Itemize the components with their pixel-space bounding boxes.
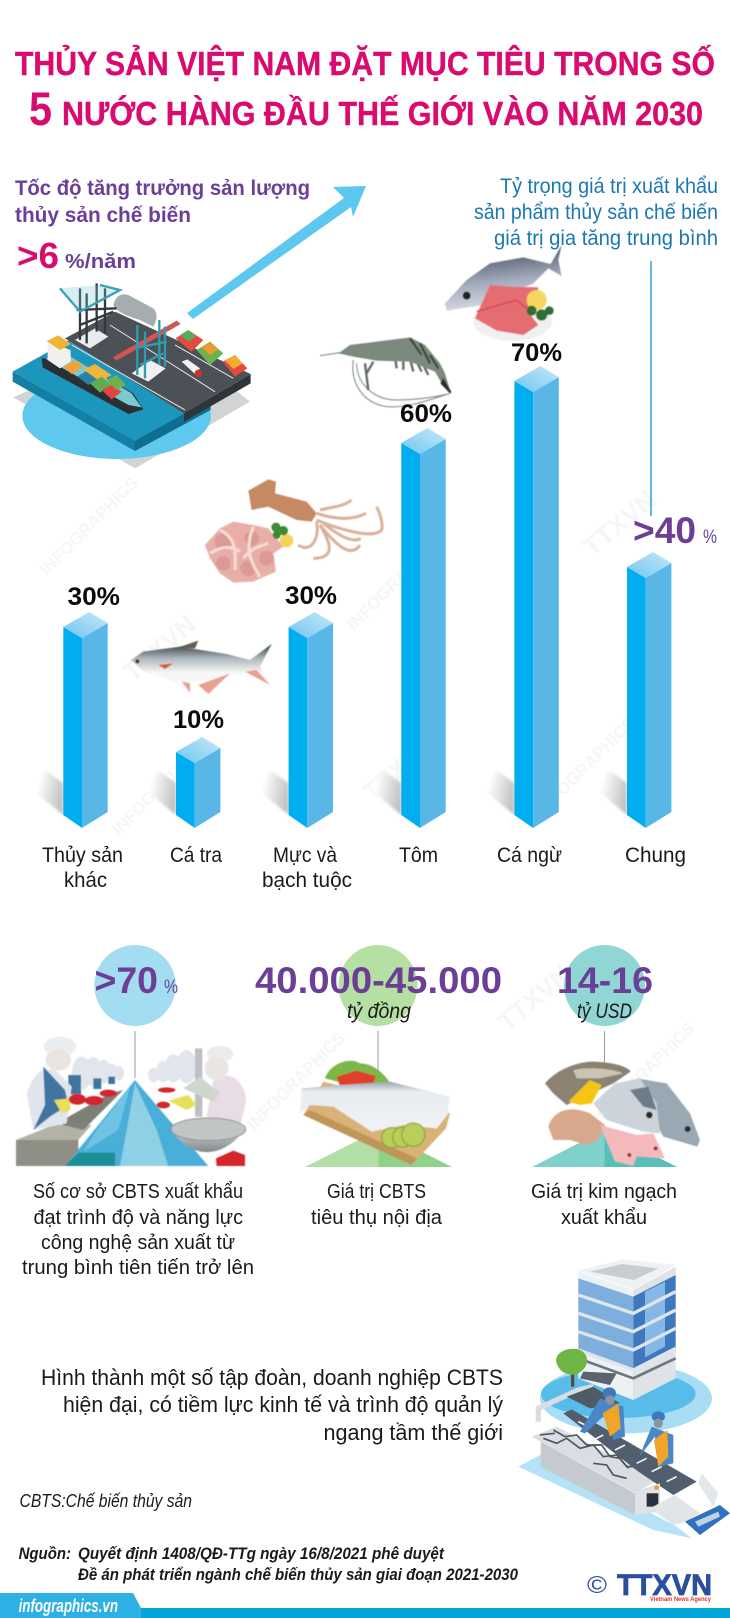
text: enterprises goal: Hình thành một số tập đoàn, doanh nghiệp CBTS: [41, 1365, 503, 1390]
text: enterprises goal: ngang tầm thế giới: [324, 1420, 503, 1445]
caption: exporters: công nghệ sản xuất từ: [41, 1231, 235, 1254]
note: abbreviation: CBTS:Chế biến thủy sản: [20, 1491, 192, 1511]
caption: export: [531, 1180, 677, 1229]
machine: [541, 1442, 635, 1515]
bar chart: [33, 366, 671, 828]
image: pangasius fillet on board: [300, 1061, 450, 1165]
watermarks: INFOGRAPHICS: [533, 713, 639, 819]
axis labels: [42, 844, 686, 892]
icon: squid and octopus: [205, 479, 382, 583]
arrow: growth: [187, 186, 366, 319]
growth heading: Tốc độ tăng trưởng sản lượng: [15, 176, 310, 200]
worker 1: [580, 1398, 625, 1440]
stat: >70%: %: [164, 977, 178, 998]
text: enterprises goal: hiện đại, có tiềm lực kinh tế và trình độ quản lý: [63, 1392, 504, 1417]
logo: TTXVN: ©: [587, 1572, 607, 1599]
worker right: [207, 1076, 246, 1127]
caption: export: Giá trị kim ngạch: [531, 1180, 677, 1203]
bar: Cá tra: [146, 737, 220, 828]
ship: [42, 356, 143, 414]
row left: [72, 1057, 124, 1090]
footer bar: [0, 1593, 730, 1618]
growth heading: >6: [17, 235, 59, 276]
triangle: teal base: [532, 1130, 677, 1167]
tree: [571, 1373, 574, 1387]
right heading: export share: [474, 175, 718, 250]
text: enterprises goal: [41, 1365, 504, 1445]
watermarks: INFOGRAPHICS: [243, 1028, 349, 1134]
axis labels: bạch tuộc: [262, 869, 352, 892]
icon: pangasius fish: [131, 641, 272, 694]
worker left: [27, 1069, 72, 1130]
silo: [113, 294, 157, 327]
stat: 40.000-45.000 tỷ đồng: tỷ đồng: [347, 1000, 411, 1023]
icon: tuna and steak: [445, 245, 562, 341]
stat circles: [94, 945, 645, 1078]
image: factory workers: [16, 1037, 246, 1166]
watermarks: TTXVN: [357, 729, 442, 807]
right heading: export share: Tỷ trọng giá trị xuất khẩu: [500, 175, 718, 198]
caption: domestic: Giá trị CBTS: [327, 1180, 426, 1203]
caption: exporters: Số cơ sở CBTS xuất khẩu: [33, 1180, 243, 1203]
axis labels: Chung: [625, 844, 686, 867]
watermarks: TTXVN: [492, 959, 577, 1037]
bar: Chung: [597, 552, 671, 828]
axis labels: Cá tra: [170, 844, 222, 867]
caption: exporters: đạt trình độ và năng lực: [34, 1206, 243, 1229]
growth heading: %/năm: [65, 251, 136, 273]
value: Chung: %: [703, 527, 717, 548]
containers: [176, 330, 247, 377]
axis labels: Tôm: [399, 844, 438, 867]
stat: 40.000-45.000 tỷ đồng: 40.000-45.000: [255, 960, 502, 1001]
caption: domestic: [311, 1180, 443, 1229]
growth heading: thủy sản chế biến: [15, 203, 191, 227]
right heading: export share: giá trị gia tăng trung bình: [494, 227, 718, 250]
caption: exporters: trung bình tiên tiến trở lên: [22, 1256, 254, 1279]
source: Quyết định 1408/QĐ-TTg ngày 16/8/2021 phê duyệt: [78, 1545, 445, 1563]
title: [15, 44, 715, 135]
bar: Mực và bạch tuộc: [258, 612, 333, 828]
caption: export: xuất khẩu: [561, 1206, 647, 1229]
stat: 14-16 tỷ USD: tỷ USD: [577, 1000, 632, 1023]
connector line: [650, 261, 652, 516]
worker 2: [639, 1427, 673, 1467]
truck: [182, 359, 200, 374]
bar values: 70%: [511, 339, 562, 367]
axis labels: Mực và: [273, 844, 337, 867]
watermarks: TTXVN: [117, 609, 202, 687]
value: Chung: >40: [633, 510, 696, 551]
image: seafood pile: [545, 1062, 700, 1166]
triangle: green base: [305, 1130, 452, 1167]
watermarks: TTXVN: [577, 484, 662, 562]
axis labels: khác: [64, 869, 107, 892]
stat: 14-16 tỷ USD: [557, 960, 653, 1023]
icon: building and processing line: [518, 1259, 730, 1538]
stat: 40.000-45.000 tỷ đồng: [255, 960, 502, 1023]
watermarks: INFOGRAPHICS: [36, 473, 142, 579]
watermarks: [36, 473, 699, 1134]
building: [578, 1272, 633, 1400]
caption: domestic: tiêu thụ nội địa: [311, 1206, 443, 1229]
bowl: [172, 1128, 245, 1152]
axis labels: Cá ngừ: [497, 844, 562, 867]
source: Nguồn:: [19, 1545, 71, 1563]
icon: port with ship: [13, 283, 251, 468]
bar values: 30%: [68, 583, 120, 611]
watermarks: INFOGRAPHICS: [108, 733, 214, 839]
axis labels: Thủy sản: [42, 844, 123, 867]
source: Đề án phát triển ngành chế biến thủy sản giai đoạn 2021-2030: [78, 1566, 519, 1584]
watermarks: INFOGRAPHICS: [593, 1018, 699, 1124]
title: 5: [29, 82, 52, 135]
logo: TTXVN: TTXVN: [617, 1569, 712, 1602]
bar values: 30%: [285, 582, 337, 610]
bar: Thủy sản khác: [33, 612, 108, 828]
bar values: 60%: [400, 400, 452, 428]
watermarks: INFOGRAPHICS: [343, 528, 449, 634]
caption: exporters: [22, 1180, 254, 1279]
icon: shrimp: [320, 337, 451, 407]
stat: 14-16 tỷ USD: 14-16: [557, 960, 653, 1001]
right heading: export share: sản phẩm thủy sản chế biến: [474, 201, 718, 224]
bar values: [68, 339, 562, 734]
logo: TTXVN: Vietnam News Agency: [650, 1596, 711, 1603]
row right: [148, 1050, 197, 1083]
captions: [22, 1180, 677, 1279]
source: [19, 1545, 519, 1584]
pillar: [195, 1048, 202, 1117]
footer bar: infographics.vn: [19, 1596, 118, 1616]
bar: Tôm: [371, 428, 446, 828]
bar values: 10%: [173, 706, 224, 734]
growth heading: [15, 176, 310, 276]
stat: >70%: >70: [94, 960, 158, 1001]
bar: Cá ngừ: [484, 366, 559, 828]
